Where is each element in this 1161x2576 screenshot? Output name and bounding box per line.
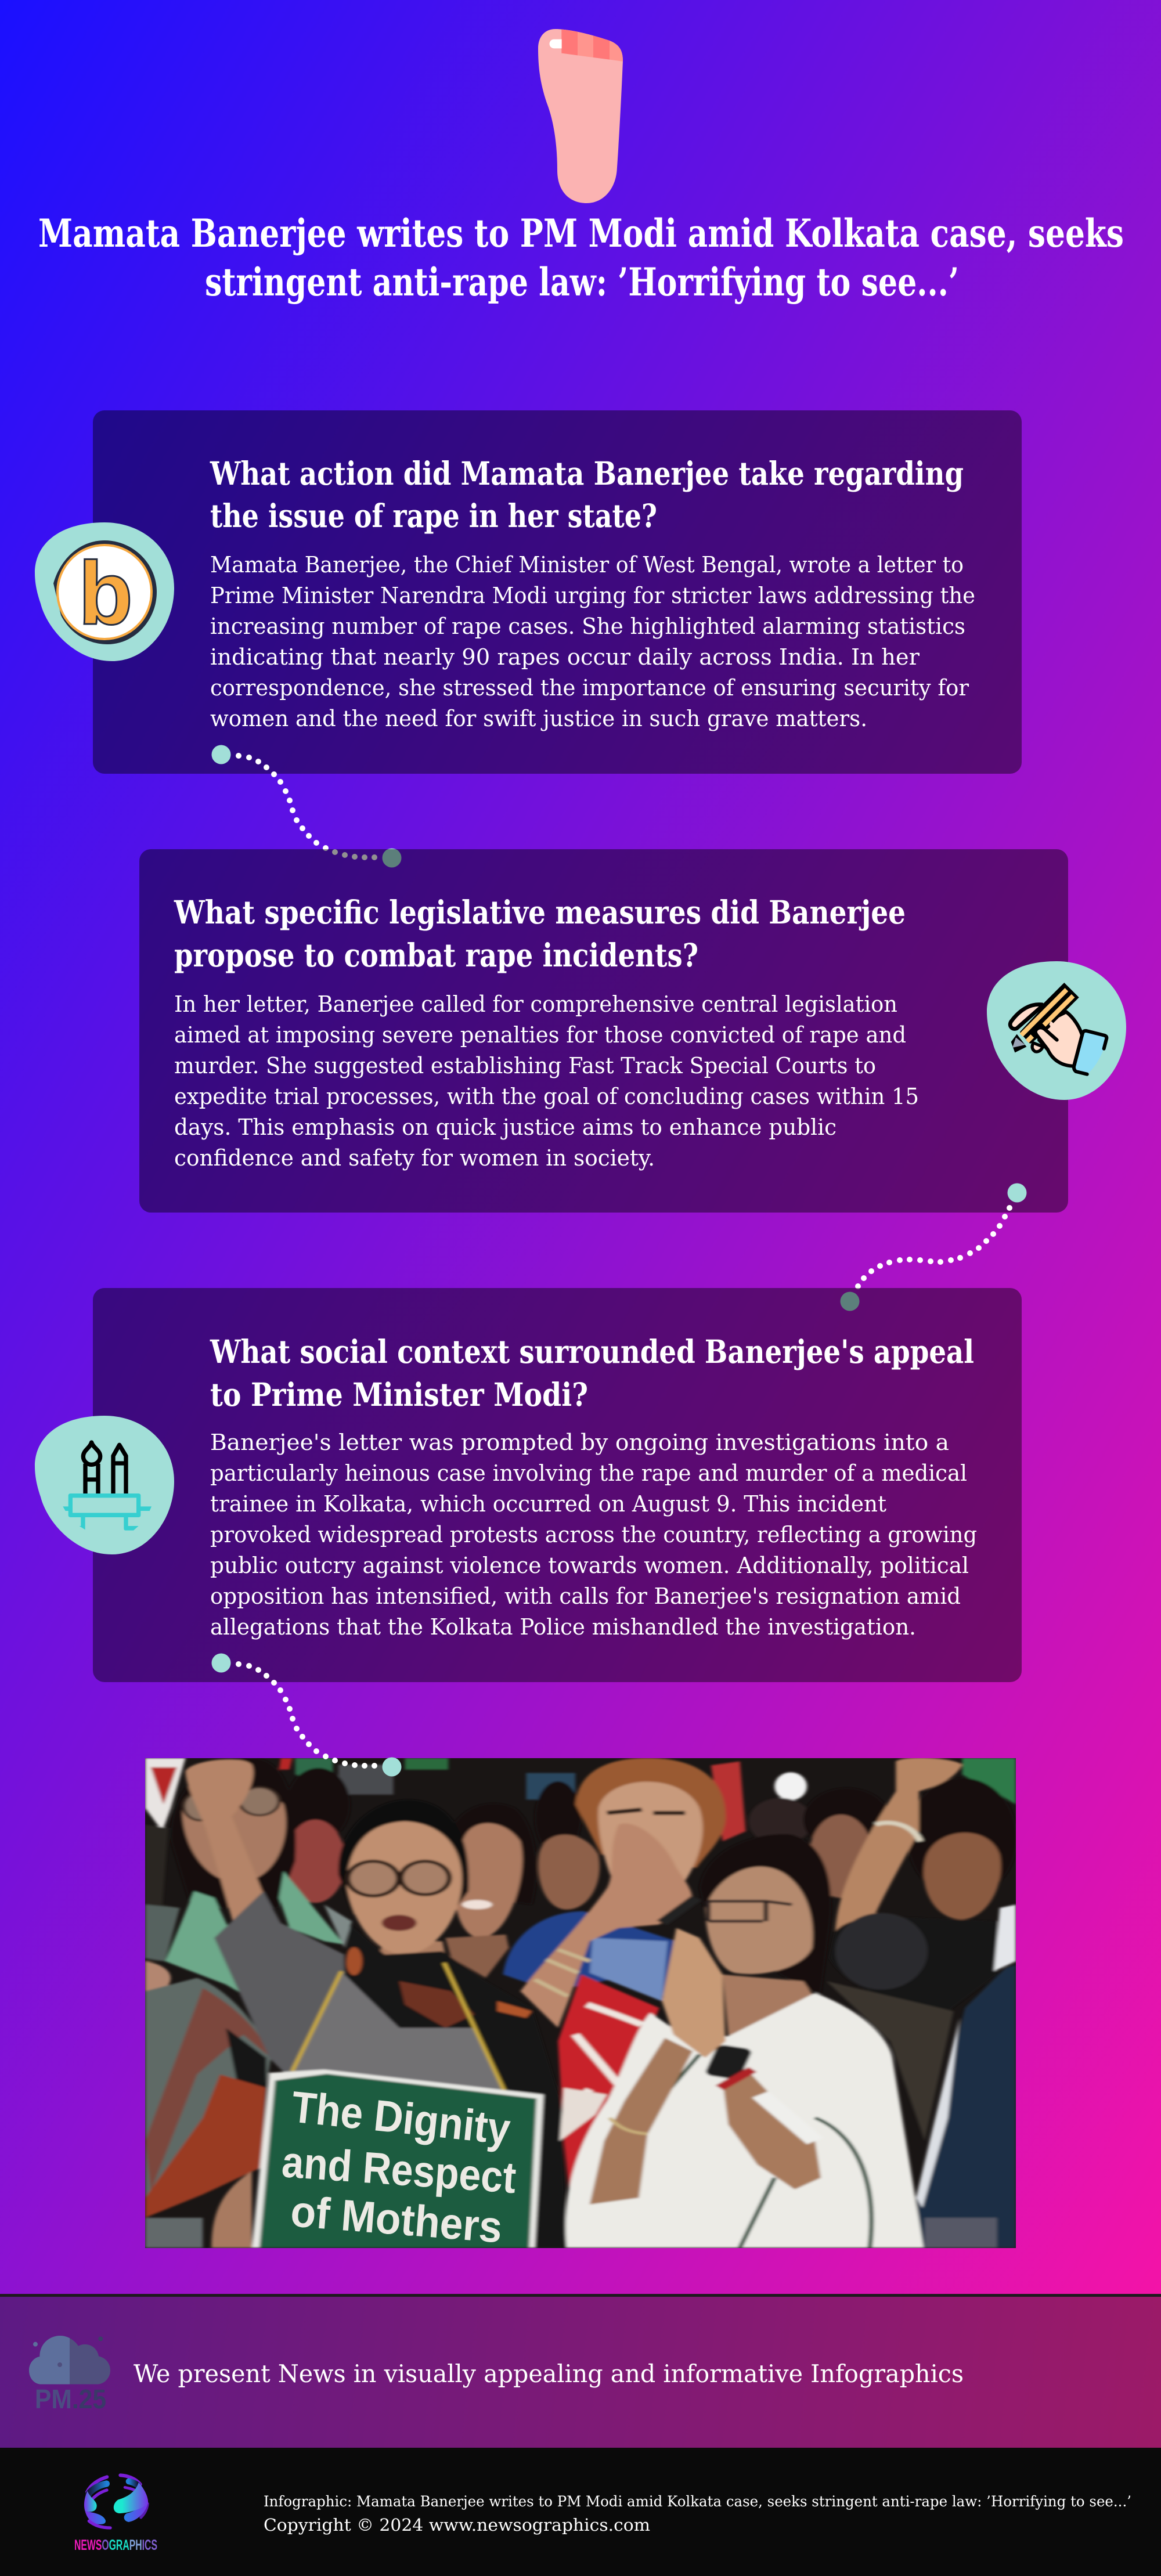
icon: letter b badge bbox=[35, 522, 174, 661]
text block: action taken: increasing number of rape cases. She highlighted alarming statistics bbox=[210, 614, 965, 639]
clasped hands bbox=[521, 1824, 692, 2028]
right crowd bbox=[803, 1788, 890, 1851]
lower-left woman bbox=[145, 1961, 171, 1994]
heading: social context: What social context surrounded Banerjee's appeal bbox=[210, 1333, 974, 1370]
Mamata arms and hands bbox=[590, 2038, 693, 2205]
text block: legislative measures: expedite trial processes, with the goal of concluding cases within 15 bbox=[174, 1084, 919, 1109]
text block: legislative measures: murder. She suggested establishing Fast Track Special Courts to bbox=[174, 1053, 876, 1078]
panel: social context bbox=[35, 1288, 1022, 1682]
heading: action taken: What action did Mamata Banerjee take regarding bbox=[210, 454, 964, 492]
logo: Newsographics bbox=[74, 2475, 157, 2553]
middle woman bbox=[448, 1803, 536, 1904]
text block: social context: particularly heinous case involving the rape and murder of a medical bbox=[210, 1460, 967, 1486]
text block: legislative measures: aimed at imposing severe penalties for those convicted of rape and bbox=[174, 1022, 906, 1048]
Mamata head bbox=[700, 1834, 831, 1994]
red banner bbox=[558, 1975, 659, 2247]
right-of-middle woman bbox=[535, 1781, 581, 1855]
heading: social context: to Prime Minister Modi? bbox=[210, 1376, 588, 1413]
text block: social context: public outcry against violence towards women. Additionally, political bbox=[210, 1553, 969, 1578]
text block: social context: provoked widespread protests across the country, reflecting a growing bbox=[210, 1522, 977, 1547]
connector: panel one to panel two bbox=[211, 745, 402, 867]
text block: social context: trainee in Kolkata, which occurred on August 9. This incident bbox=[210, 1491, 886, 1517]
text block: legislative measures: confidence and safety for women in society. bbox=[174, 1145, 655, 1171]
icon: foot bbox=[538, 27, 625, 203]
speaker hair, face bbox=[338, 1799, 468, 1914]
white sari bbox=[565, 1993, 924, 2247]
copyright: Copyright © 2024 www.newsographics.com bbox=[264, 2515, 650, 2535]
heading: action taken: the issue of rape in her state? bbox=[210, 497, 657, 535]
scarf bbox=[344, 1925, 567, 2247]
heading: legislative measures: propose to combat rape incidents? bbox=[174, 936, 698, 974]
text block: legislative measures bbox=[174, 991, 919, 1171]
text block: legislative measures: In her letter, Banerjee called for comprehensive central legislation bbox=[174, 991, 897, 1017]
left back woman bbox=[171, 1758, 295, 1908]
backdrop bbox=[145, 1758, 185, 1831]
text block: action taken: Prime Minister Narendra Modi urging for stricter laws addressing the bbox=[210, 583, 975, 608]
title: stringent anti-rape law: ’Horrifying to see...’ bbox=[205, 259, 959, 305]
icon: PM 2.5 cloud bbox=[29, 2336, 110, 2414]
text block: action taken: correspondence, she stressed the importance of ensuring security for bbox=[210, 675, 969, 701]
icon: hand holding pencil bbox=[987, 961, 1126, 1100]
sign text: and Respect bbox=[280, 2137, 518, 2203]
text block: social context: Banerjee's letter was prompted by ongoing investigations into a bbox=[210, 1430, 949, 1455]
logo: Newsographics: NEWSOGRAPHICS bbox=[74, 2537, 157, 2553]
speaker raised arm and sleeve bbox=[183, 1758, 267, 1921]
footer bbox=[0, 2448, 1161, 2576]
icon: letter b badge: b bbox=[78, 543, 133, 643]
tagline text: We present News in visually appealing and informative Infographics bbox=[134, 2359, 964, 2388]
footer caption: Infographic: Mamata Banerjee writes to PM Modi amid Kolkata case, seeks stringent anti-rape law: ’Horrifying to see...’ bbox=[264, 2493, 1131, 2510]
sign text: The Dignity bbox=[289, 2082, 513, 2154]
text block: action taken: women and the need for swift justice in such grave matters. bbox=[210, 706, 867, 731]
text block: action taken: indicating that nearly 90 rapes occur daily across India. In her bbox=[210, 644, 920, 670]
pink-faced person bbox=[288, 1767, 351, 1833]
connector: panel two to panel three bbox=[841, 1183, 1026, 1311]
heading: action taken bbox=[210, 454, 964, 535]
heading: legislative measures: What specific legislative measures did Banerjee bbox=[174, 893, 906, 931]
text block: social context: opposition has intensified, with calls for Banerjee's resignation amid bbox=[210, 1583, 961, 1609]
tagline band bbox=[0, 2294, 1161, 2448]
sign text bbox=[280, 2082, 518, 2253]
photo: Mamata Banerjee at protest march bbox=[145, 1758, 1017, 2253]
text block: action taken: Mamata Banerjee, the Chief Minister of West Bengal, wrote a letter to bbox=[210, 552, 964, 578]
sign text: of Mothers bbox=[289, 2187, 504, 2253]
connector: panel three to photo bbox=[211, 1653, 402, 1776]
icon: brushes on stand bbox=[35, 1416, 174, 1554]
sign board bbox=[252, 2069, 543, 2247]
icon: PM 2.5 cloud: PM.25 bbox=[35, 2384, 106, 2414]
panel: action taken bbox=[35, 410, 1022, 774]
text block: social context bbox=[210, 1430, 977, 1640]
heading: legislative measures bbox=[174, 893, 906, 974]
text block: action taken bbox=[210, 552, 975, 731]
text block: social context: allegations that the Kolkata Police mishandled the investigation. bbox=[210, 1614, 916, 1640]
heading: social context bbox=[210, 1333, 974, 1413]
title bbox=[38, 211, 1124, 305]
panel: legislative measures bbox=[139, 849, 1126, 1213]
orange hair woman bbox=[575, 1758, 726, 1868]
text block: legislative measures: days. This emphasis on quick justice aims to enhance public bbox=[174, 1114, 837, 1140]
